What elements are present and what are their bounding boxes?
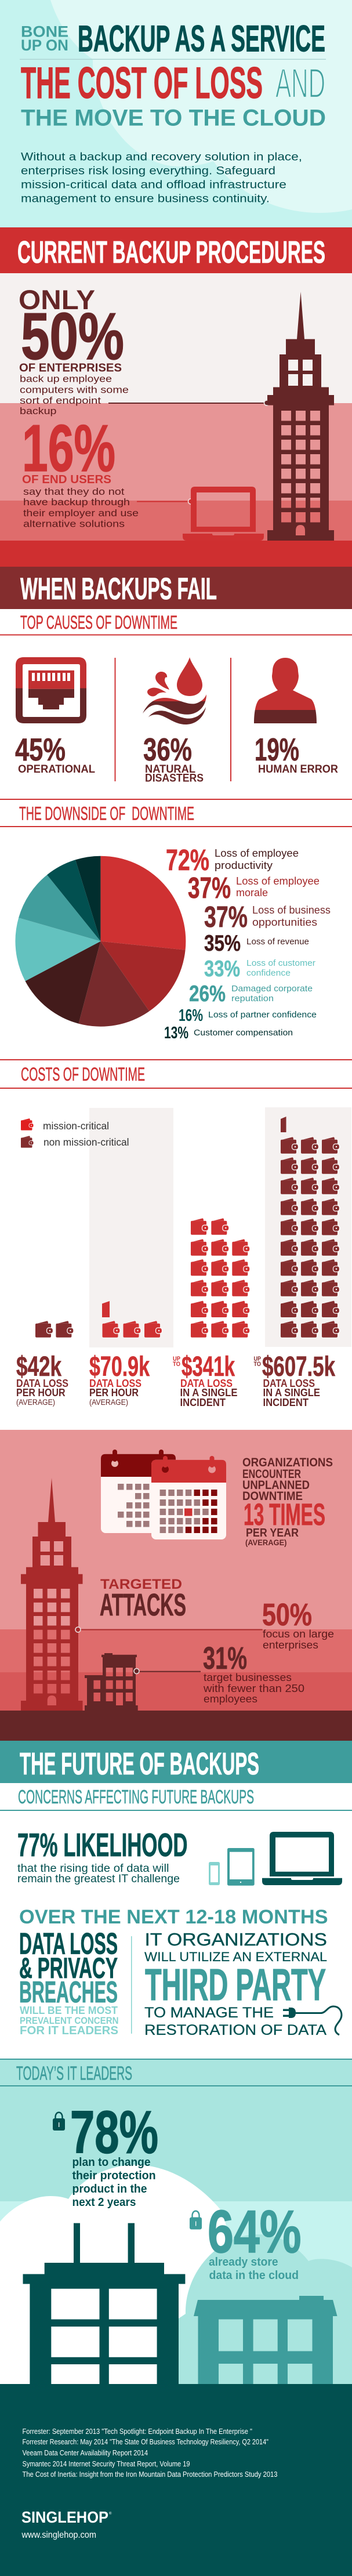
- text: unplanned downtime 13 times: UNPLANNED: [242, 1479, 310, 1492]
- text: data loss and privacy breaches: PREVALENT CONCERN: [20, 2015, 118, 2026]
- legend: 37% morale: 37%: [188, 871, 231, 904]
- text: end users: say that they do not: [23, 486, 125, 497]
- text: unplanned downtime 13 times: PER YEAR: [246, 1527, 299, 1539]
- heading: costs of downtime: COSTS OF DOWNTIME: [21, 1064, 145, 1085]
- stat: $70.9k: $70.9k: [89, 1352, 150, 1382]
- legend: 35%: [204, 931, 309, 956]
- stat: only 50%: OF ENTERPRISES: [19, 362, 122, 375]
- icon: network port: [16, 657, 86, 723]
- legend: 16%: [179, 1006, 317, 1025]
- legend: 37% morale: [188, 871, 320, 904]
- stat: 31% small businesses: 31%: [203, 1641, 247, 1676]
- legend: wallet key: mission-critical: [43, 1120, 109, 1132]
- heading: targeted attacks: [100, 1577, 186, 1622]
- stat: 50% large enterprises: 50%: [262, 1597, 312, 1632]
- text: end users: alternative solutions: [23, 519, 125, 530]
- stat: up to $607.5k: INCIDENT: [263, 1397, 309, 1408]
- stat: up to $341k: [173, 1352, 238, 1408]
- stat: only 50%: [19, 284, 124, 375]
- icon: back calendar: [101, 1450, 176, 1533]
- intro paragraph: management to ensure business continuity.: [21, 193, 270, 205]
- icon: water: [143, 657, 206, 724]
- panel: footer: [0, 2384, 352, 2576]
- stat: $70.9k: (AVERAGE): [89, 1398, 128, 1407]
- stat: 77% likelihood: that the rising tide of data will: [17, 1862, 169, 1875]
- legend: 37% opportunities: [204, 900, 331, 933]
- legend: wallet key: non mission-critical: [43, 1136, 129, 1148]
- heading: bone up on: UP ON: [21, 37, 68, 54]
- pictogram: $607.5k wallets: [281, 1117, 340, 1338]
- text: employee computers: back up employee: [20, 374, 112, 385]
- text: plan to change: product in the: [72, 2183, 147, 2195]
- stat: $70.9k: PER HOUR: [89, 1387, 139, 1398]
- legend: wallet key: [21, 1118, 129, 1148]
- stat: 45% operational: OPERATIONAL: [18, 763, 95, 776]
- heading: top causes of downtime: TOP CAUSES OF DOWNTIME: [20, 612, 177, 633]
- heading: targeted attacks: ATTACKS: [100, 1588, 186, 1622]
- stat: up to $341k: DATA LOSS: [180, 1378, 233, 1389]
- text: it organizations third party: TO MANAGE THE: [144, 2005, 274, 2021]
- cloud: white: [0, 2165, 229, 2384]
- connector: laptop: [137, 499, 194, 504]
- text: it organizations third party: WILL UTILIZE AN EXTERNAL: [144, 1950, 327, 1964]
- icon: laptop: [262, 1832, 342, 1885]
- text: unplanned downtime 13 times: (AVERAGE): [245, 1538, 286, 1547]
- stat: up to $607.5k: [254, 1352, 335, 1408]
- panel: header: [0, 0, 352, 227]
- text: end users: their employer and use: [23, 508, 139, 519]
- legend: 13%: [164, 1024, 293, 1042]
- text: data loss and privacy breaches: BREACHES: [19, 1976, 118, 2009]
- panel: today's it leaders: [0, 2059, 352, 2384]
- text: it organizations third party: IT ORGANIZATIONS: [145, 1929, 327, 1950]
- text: data loss and privacy breaches: FOR IT LEADERS: [20, 2024, 118, 2037]
- text: it organizations third party: [144, 1929, 327, 2038]
- text: employee computers: [20, 374, 129, 416]
- pictogram: $70.9k wallets: [102, 1301, 162, 1338]
- text: sources: [22, 2428, 278, 2479]
- stat: 36% natural disasters: NATURAL: [145, 763, 195, 776]
- cloud: teal: [179, 2234, 352, 2384]
- stat: 50% large enterprises: [262, 1597, 334, 1651]
- text: already store: data in the cloud: [209, 2269, 299, 2282]
- section band: when backups fail: WHEN BACKUPS FAIL: [20, 572, 217, 606]
- text: it organizations third party: RESTORATION OF DATA: [144, 2022, 326, 2038]
- text: sources: Symantec 2014 Internet Security Threat Report, Volume 19: [22, 2460, 190, 2468]
- text: end users: have backup through: [23, 497, 130, 508]
- icon: large tower: [21, 1478, 82, 1711]
- title: the move to the cloud: THE MOVE TO THE CLOUD: [21, 106, 326, 131]
- stat: up to $341k: TO: [173, 1361, 180, 1368]
- text: already store: already store: [209, 2256, 278, 2269]
- stat: 50% large enterprises: enterprises: [263, 1639, 318, 1651]
- stat: up to $607.5k: TO: [254, 1361, 261, 1368]
- legend: 26%: reputation: [231, 994, 274, 1003]
- text: sources: Veeam Data Center Availability Report 2014: [22, 2449, 148, 2457]
- stat: only 50%: 50%: [21, 300, 124, 374]
- legend: 37% opportunities: opportunities: [252, 916, 317, 928]
- text: sources: Forrester Research: May 2014 "The State Of Business Technology Resiliency, Q2 2014": [22, 2438, 268, 2446]
- icon: laptop: [183, 487, 264, 541]
- text: plan to change: [72, 2156, 156, 2209]
- stat: $42k: $42k: [16, 1352, 61, 1382]
- text: employee computers: computers with some: [20, 384, 129, 396]
- text: plan to change: their protection: [72, 2169, 156, 2182]
- text: data loss and privacy breaches: [19, 1928, 118, 2037]
- panel: attacks background: [0, 1430, 352, 1741]
- text: data loss and privacy breaches: DATA LOSS: [19, 1928, 118, 1961]
- text: data loss and privacy breaches: & PRIVACY: [19, 1952, 118, 1984]
- stat: $42k: DATA LOSS: [16, 1378, 68, 1389]
- legend: 72%: [166, 843, 299, 876]
- stat: 36% natural disasters: DISASTERS: [145, 773, 204, 784]
- stat: 64%: 64%: [208, 2198, 302, 2266]
- stat: only 50%: ONLY: [19, 284, 95, 315]
- icon: tower: [267, 292, 334, 541]
- legend: 72%: productivity: [215, 860, 273, 871]
- legend: 26%: Damaged corporate: [231, 984, 313, 994]
- legend: 16%: Loss of partner confidence: [208, 1010, 317, 1020]
- legend: 37% morale: morale: [236, 887, 268, 898]
- stat: 16%: 16%: [22, 412, 115, 486]
- panel: column two background: [89, 1108, 173, 1347]
- legend: 33%: Loss of customer: [246, 958, 315, 968]
- stat: 36% natural disasters: [143, 731, 204, 784]
- stat: up to $341k: $341k: [182, 1352, 235, 1382]
- heading: the downside of downtime: THE DOWNSIDE OF DOWNTIME: [19, 803, 194, 824]
- legend: 37% opportunities: 37%: [204, 900, 248, 933]
- legend: 26%: [189, 981, 313, 1006]
- heading: today's it leaders: TODAY’S IT LEADERS: [16, 2063, 132, 2084]
- stat: up to $341k: INCIDENT: [180, 1397, 226, 1408]
- legend: 13%: Customer compensation: [194, 1028, 293, 1038]
- legend: 35%: 35%: [204, 931, 241, 956]
- stat: $70.9k: [89, 1352, 150, 1407]
- legend: 26%: 26%: [189, 981, 226, 1006]
- legend: 37% opportunities: Loss of business: [252, 904, 331, 916]
- icon: teal building: [194, 2296, 338, 2384]
- intro paragraph: [21, 151, 302, 205]
- stat: 77% likelihood: [17, 1827, 188, 1885]
- text: plan to change: next 2 years: [72, 2196, 136, 2209]
- icon: dark building: [23, 2223, 185, 2384]
- logo: singlehop: SINGLEHOP: [21, 2508, 108, 2526]
- legend: 33%: 33%: [204, 957, 240, 981]
- stat: 45% operational: 45%: [15, 731, 66, 767]
- text: plan to change: plan to change: [72, 2156, 151, 2169]
- icon: person: [254, 658, 317, 723]
- legend: 33%: [204, 957, 315, 981]
- stat: up to $607.5k: UP: [254, 1356, 261, 1363]
- stat: 31% small businesses: target businesses: [204, 1671, 292, 1683]
- stat: 78%: 78%: [70, 2099, 158, 2166]
- legend: 16%: 16%: [179, 1006, 203, 1025]
- stat: $42k: (AVERAGE): [16, 1398, 55, 1407]
- intro paragraph: enterprises risk losing everything. Safeguard: [21, 165, 275, 177]
- stat: 77% likelihood: remain the greatest IT challenge: [17, 1872, 180, 1885]
- legend: 72%: 72%: [166, 843, 209, 876]
- icon: tablet: [227, 1848, 255, 1886]
- icon: lock: [53, 2113, 65, 2131]
- stat: 31% small businesses: employees: [204, 1693, 257, 1705]
- icon: small building: [85, 1653, 138, 1711]
- stat: 45% operational: [15, 731, 95, 776]
- legend: 35%: Loss of revenue: [246, 937, 309, 947]
- icon: lock: [190, 2211, 202, 2230]
- icon: front calendar: [151, 1456, 226, 1539]
- panel: column four background: [265, 1107, 351, 1347]
- text: end users: [23, 486, 139, 530]
- stat: 31% small businesses: [203, 1641, 304, 1705]
- intro paragraph: Without a backup and recovery solution in place,: [21, 151, 302, 164]
- pictogram: $42k wallets: [35, 1321, 74, 1338]
- connector: large tower: [75, 1627, 263, 1632]
- text: unplanned downtime 13 times: [242, 1456, 333, 1547]
- legend: 37% morale: Loss of employee: [236, 875, 320, 887]
- pictogram: $341k wallets: [191, 1218, 250, 1338]
- text: data loss and privacy breaches: WILL BE THE MOST: [20, 2004, 118, 2016]
- text: unplanned downtime 13 times: ORGANIZATIONS: [242, 1456, 333, 1469]
- heading: over the next 12-18 months: OVER THE NEXT 12-18 MONTHS: [19, 1906, 328, 1928]
- intro paragraph: mission-critical data and offload infrastructure: [21, 179, 286, 191]
- stat: 16%: OF END USERS: [22, 473, 111, 486]
- text: employee computers: sort of endpoint: [20, 395, 101, 406]
- stat: $70.9k: DATA LOSS: [89, 1378, 141, 1389]
- panel: current backup stats: [0, 273, 352, 567]
- connector: tower: [108, 400, 269, 405]
- icon: power plug: [283, 2006, 342, 2035]
- text: unplanned downtime 13 times: ENCOUNTER: [242, 1468, 301, 1481]
- legend: 72%: Loss of employee: [215, 847, 299, 859]
- stat: up to $607.5k: IN A SINGLE: [263, 1387, 320, 1398]
- stat: 31% small businesses: with fewer than 250: [203, 1682, 304, 1694]
- stat: 19% human error: 19%: [255, 731, 299, 767]
- pie chart: [15, 856, 186, 1027]
- stat: 50% large enterprises: focus on large: [263, 1628, 334, 1640]
- stat: up to $341k: IN A SINGLE: [180, 1387, 238, 1398]
- heading: targeted attacks: TARGETED: [100, 1577, 182, 1592]
- logo: singlehop: ®: [109, 2512, 112, 2516]
- legend: 33%: confidence: [246, 968, 291, 978]
- icon: phone: [209, 1862, 220, 1885]
- text: employee computers: backup: [20, 405, 57, 416]
- stat: $42k: PER HOUR: [16, 1387, 66, 1398]
- connector: small building: [134, 1668, 201, 1674]
- heading: bone up on: BONE: [21, 23, 68, 41]
- text: already store: [209, 2256, 299, 2282]
- heading: bone up on: [21, 23, 68, 54]
- stat: $42k: [16, 1352, 68, 1407]
- stat: 19% human error: HUMAN ERROR: [258, 763, 338, 776]
- stat: up to $341k: UP: [173, 1356, 180, 1363]
- text: unplanned downtime 13 times: DOWNTIME: [242, 1490, 303, 1503]
- stat: 77% likelihood: 77% LIKELIHOOD: [17, 1827, 188, 1864]
- text: sources: The Cost of Inertia: Insight from the Iron Mountain Data Protection Predictors Study 2013: [22, 2470, 278, 2479]
- stat: up to $607.5k: DATA LOSS: [263, 1378, 315, 1389]
- stat: 19% human error: [255, 731, 338, 776]
- stat: 36% natural disasters: 36%: [143, 731, 192, 767]
- legend: 13%: 13%: [164, 1024, 188, 1042]
- text: sources: Forrester: September 2013 "Tech Spotlight: Endpoint Backup In The Enterprise ": [22, 2428, 252, 2436]
- text: website: www.singlehop.com: [21, 2530, 96, 2540]
